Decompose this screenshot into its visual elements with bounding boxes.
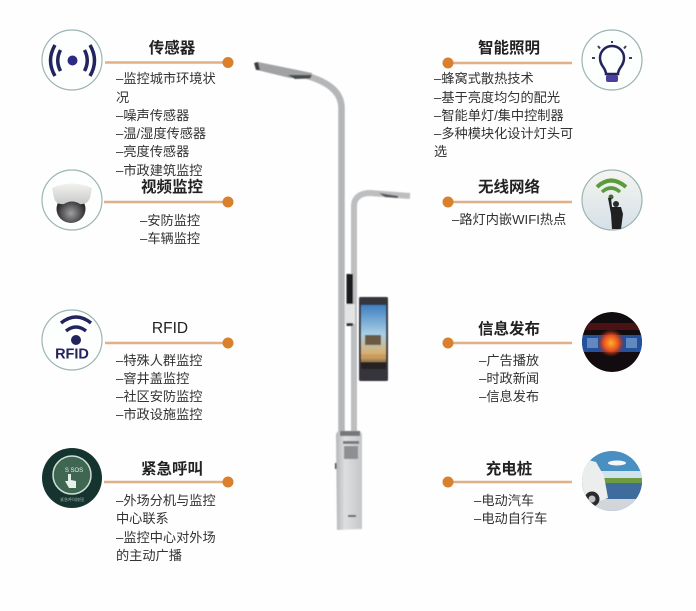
text block: –广告播放 (479, 353, 539, 368)
main lamp dark underside (288, 75, 312, 79)
text block (116, 493, 216, 563)
text block (116, 70, 216, 178)
text block: –亮度传感器 (116, 143, 189, 159)
text block: –电动自行车 (474, 510, 547, 526)
panel: RFID (42, 310, 234, 422)
text block: –安防监控 (140, 213, 200, 228)
icon: SOS button (42, 448, 102, 508)
panel: sensors (42, 30, 234, 178)
icon: RFID (42, 310, 102, 370)
text block: –多种模块化设计灯头可 (434, 125, 573, 141)
heading: 无线网络 (478, 177, 540, 196)
main lamp head (255, 62, 312, 78)
text block: –市政设施监控 (116, 406, 202, 422)
icon: SOS button: S SOS (65, 468, 83, 474)
text block: –路灯内嵌WIFI热点 (452, 212, 566, 227)
heading: 充电桩 (486, 459, 532, 478)
panel: charging pile (442, 450, 644, 526)
text block: –蜂窝式散热技术 (434, 70, 534, 86)
heading: 紧急呼叫 (141, 460, 203, 478)
second pole and arm (354, 193, 410, 432)
black sensor strip (346, 274, 353, 304)
icon: electric car photo (582, 451, 642, 511)
text block: 中心联系 (116, 511, 169, 526)
icon: SOS button: 紧急呼叫按钮 (60, 496, 84, 502)
connector line (104, 196, 234, 208)
icon: LED display photo (580, 312, 644, 372)
pole base cabinet (335, 431, 362, 530)
icon: wifi with man (582, 170, 642, 230)
main pole and arm (300, 74, 342, 432)
street light pole (254, 62, 410, 530)
text block (479, 353, 539, 404)
text block (434, 70, 573, 159)
panel: video surveillance (42, 170, 234, 246)
text block: 选 (434, 144, 447, 159)
text block: –智能单灯/集中控制器 (434, 108, 564, 123)
text block: –特殊人群监控 (116, 353, 202, 368)
text block: –外场分机与监控 (116, 493, 216, 508)
text block (474, 492, 547, 526)
text block: –社区安防监控 (116, 389, 202, 404)
icon: sensor signal (42, 30, 102, 90)
connector line (442, 196, 572, 208)
infographic canvas (41, 29, 643, 562)
connector line (105, 57, 234, 68)
text block: –监控城市环境状 (116, 70, 216, 86)
connector line (442, 58, 572, 68)
icon: RFID: RFID (55, 346, 89, 362)
panel: smart lighting (434, 30, 642, 159)
heading: 传感器 (149, 38, 196, 57)
panel: wireless network (442, 170, 642, 230)
heading: 信息发布 (478, 319, 540, 338)
text block: –车辆监控 (140, 230, 200, 246)
connector line (442, 338, 572, 348)
icon: dome camera (42, 170, 102, 230)
second lamp dark underside (379, 193, 398, 198)
icon: light bulb (582, 30, 642, 90)
text block: –电动汽车 (474, 492, 534, 508)
text block (140, 213, 200, 246)
text block: 的主动广播 (116, 548, 182, 563)
heading: 视频监控 (141, 177, 203, 196)
text block: –温/湿度传感器 (116, 125, 206, 141)
heading: RFID (152, 320, 188, 337)
text block: 况 (116, 90, 129, 105)
panel: emergency call (42, 448, 234, 563)
heading: 智能照明 (478, 38, 540, 57)
text block (116, 353, 202, 422)
connector line (442, 476, 572, 488)
text block: –噪声传感器 (116, 107, 189, 123)
text block: –窨井盖监控 (116, 370, 189, 386)
white bracket (345, 304, 355, 324)
panel: information release (442, 312, 644, 404)
text block: –基于亮度均匀的配光 (434, 89, 560, 105)
connector line (104, 476, 234, 488)
connector line (105, 338, 234, 348)
text block: –监控中心对外场 (116, 530, 216, 545)
LED display screen (359, 297, 388, 381)
text block: –市政建筑监控 (116, 162, 202, 178)
text block: –信息发布 (479, 388, 539, 404)
text block: –时政新闻 (479, 371, 539, 386)
